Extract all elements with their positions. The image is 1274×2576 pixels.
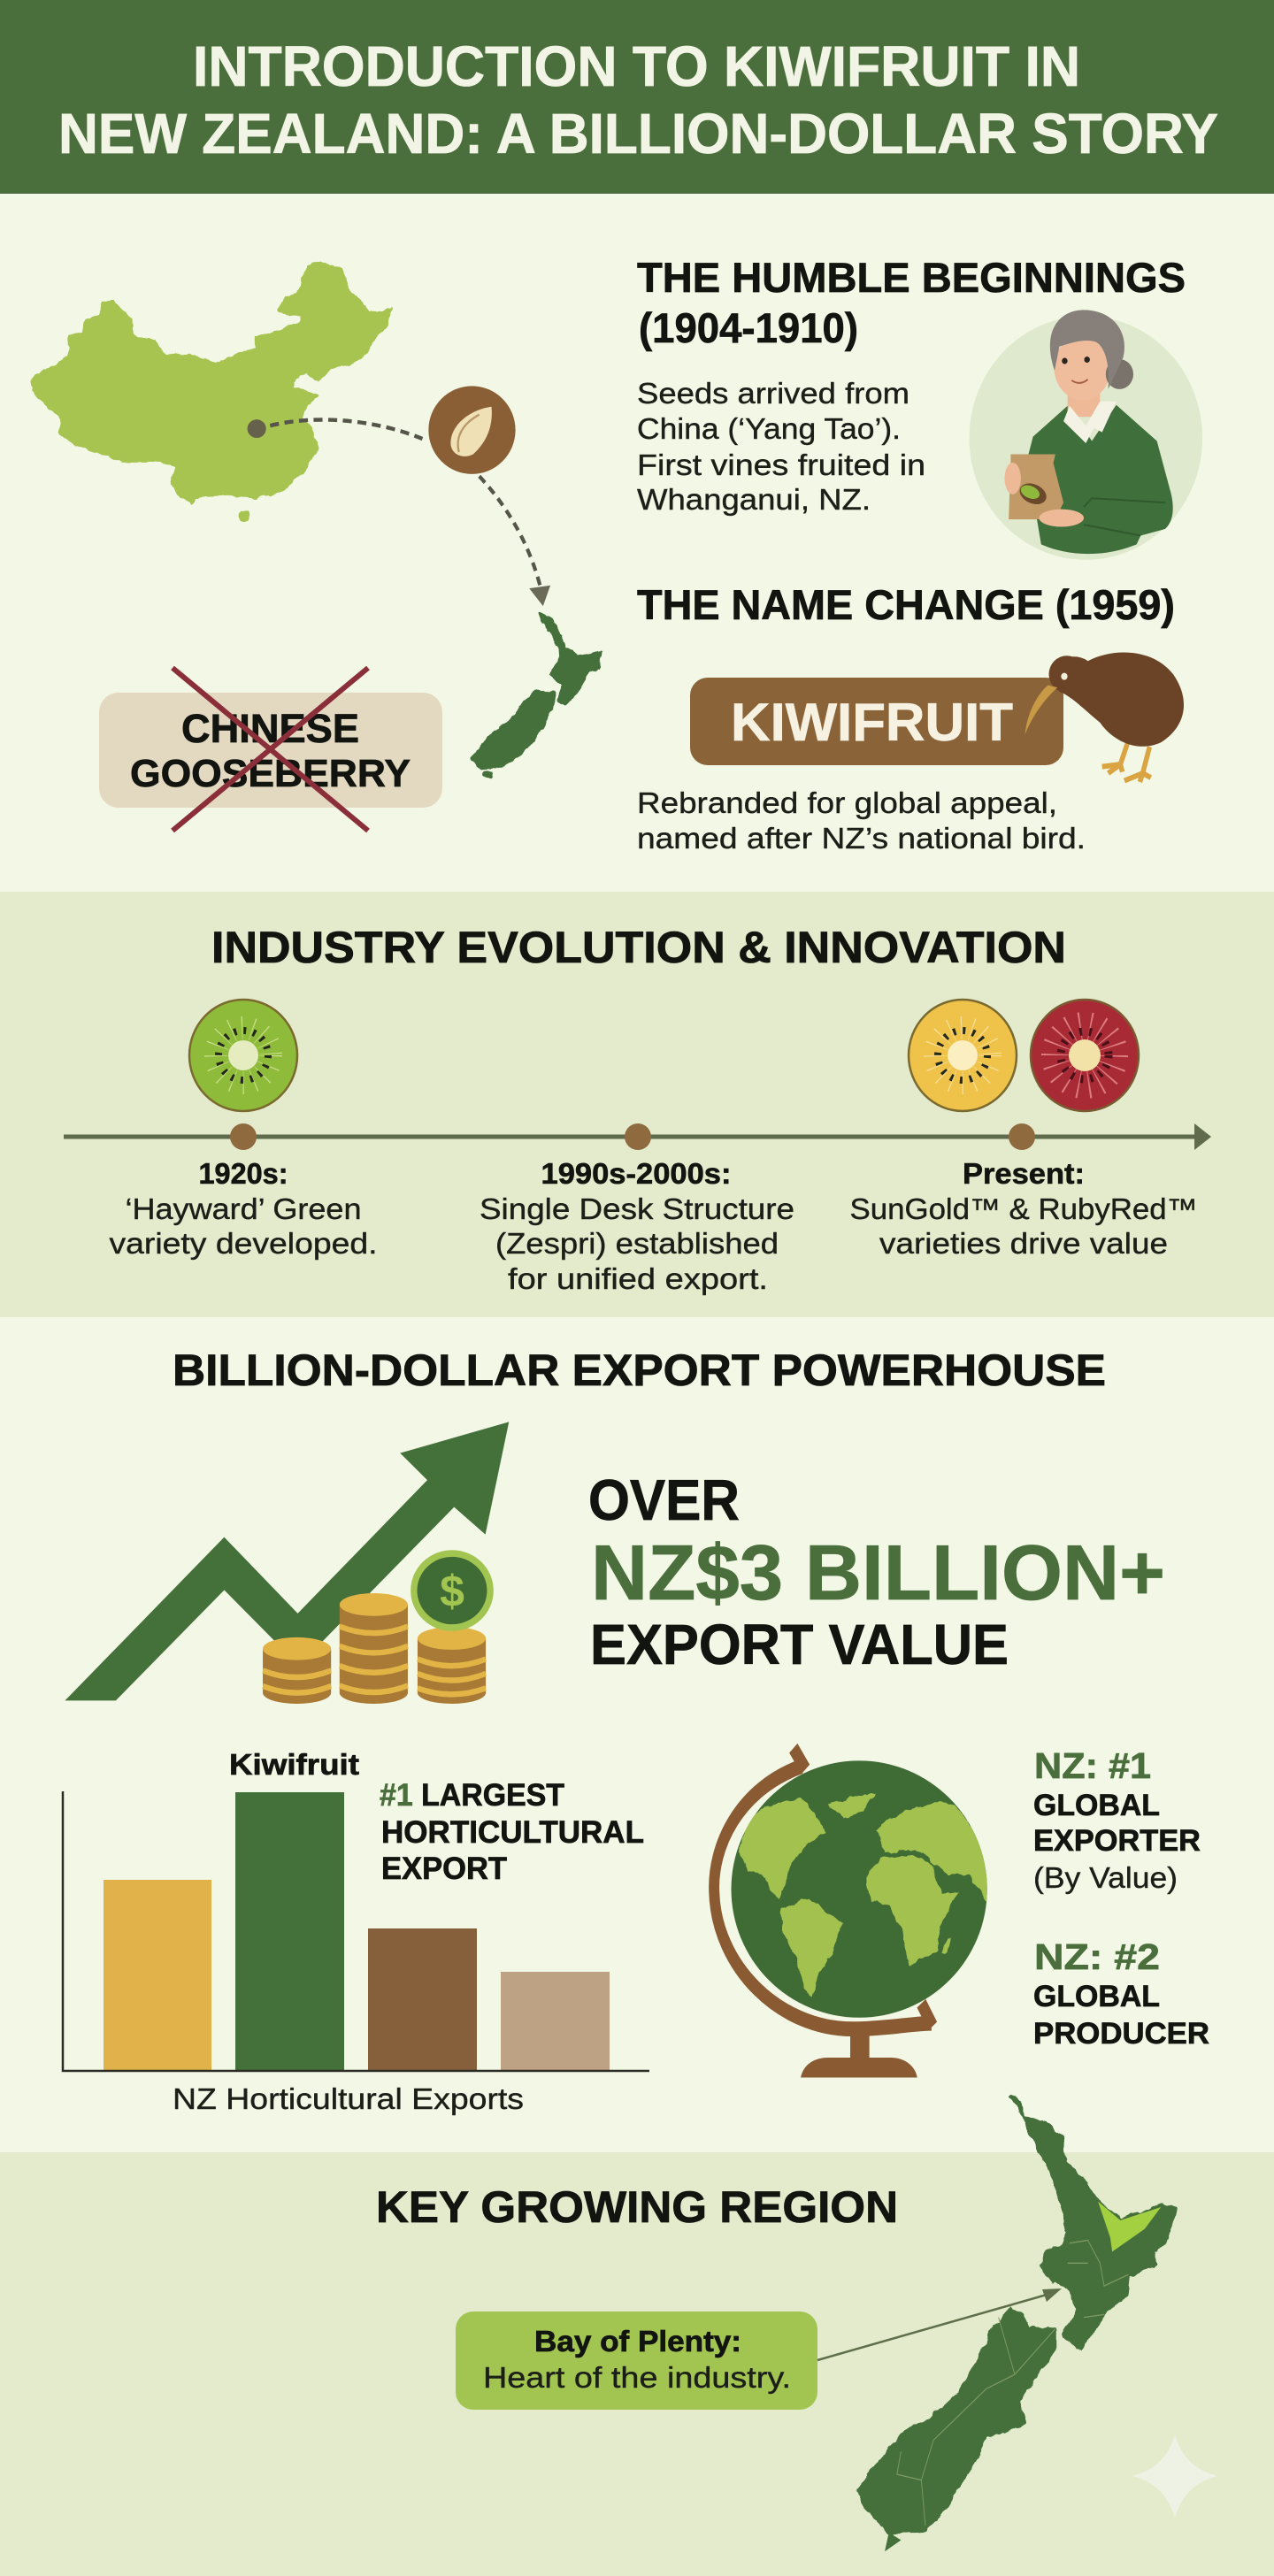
timeline text: 1920s: ‘Hayward’ Green xyxy=(126,1192,361,1225)
callout: Bay of Plenty xyxy=(456,2312,817,2410)
stat: global exporter: NZ: #1 xyxy=(1034,1745,1151,1786)
timeline text: 1990s-2000s: 1990s-2000s: xyxy=(541,1157,731,1190)
timeline arrow xyxy=(64,1123,1211,1150)
growth arrow xyxy=(65,1422,509,1700)
South Island xyxy=(858,2309,1055,2532)
icon: kiwi bird xyxy=(1025,652,1184,782)
heading: industry evolution: INDUSTRY EVOLUTION & INNOVATION xyxy=(211,923,1066,972)
text: rebranded: named after NZ’s national bird. xyxy=(637,822,1086,855)
callout: Bay of Plenty: Heart of the industry. xyxy=(483,2361,791,2394)
crossed out label: Chinese Gooseberry: CHINESE xyxy=(181,706,359,751)
chart arrow with coins xyxy=(65,1422,509,1704)
dollar badge circle xyxy=(411,1550,494,1631)
callout: largest horticultural export xyxy=(380,1778,644,1886)
title xyxy=(58,34,1218,165)
text: rebranded: Rebranded for global appeal, xyxy=(637,786,1057,819)
timeline text: 1920s: variety developed. xyxy=(110,1227,377,1260)
chart label: Kiwifruit: Kiwifruit xyxy=(229,1748,359,1781)
route start marker xyxy=(248,419,266,438)
stat: over NZ$3 billion: OVER xyxy=(588,1468,740,1532)
icon: globe xyxy=(714,1748,990,2078)
panel: title banner xyxy=(0,0,1274,194)
illustration: woman holding seed bag xyxy=(970,310,1202,560)
map: China xyxy=(30,262,392,521)
heading: key growing region: KEY GROWING REGION xyxy=(376,2182,898,2232)
label: Kiwifruit xyxy=(690,678,1063,765)
text: rebranded xyxy=(637,786,1086,855)
stat: global exporter: GLOBAL xyxy=(1033,1789,1160,1822)
timeline text: 1920s: 1920s: xyxy=(198,1157,288,1190)
timeline text: present xyxy=(849,1157,1198,1260)
stat: over NZ$3 billion: EXPORT VALUE xyxy=(590,1613,1009,1676)
stat: global exporter: (By Value) xyxy=(1033,1861,1178,1894)
callout: largest horticultural export: EXPORT xyxy=(381,1852,507,1886)
timeline text: 1990s-2000s: for unified export. xyxy=(508,1262,768,1295)
callout: largest horticultural export: HORTICULTURAL xyxy=(381,1815,644,1850)
icon: sparkle xyxy=(1132,2434,1217,2518)
arrow: callout to map xyxy=(817,2288,1062,2360)
heading: humble beginnings: (1904-1910) xyxy=(639,304,858,351)
stat: global producer xyxy=(1033,1936,1209,2051)
map: China to New Zealand seed route xyxy=(30,262,601,778)
crossed out label: Chinese Gooseberry xyxy=(99,668,442,831)
heading: export powerhouse: BILLION-DOLLAR EXPORT POWERHOUSE xyxy=(173,1346,1106,1395)
heading: humble beginnings: THE HUMBLE BEGINNINGS xyxy=(637,254,1186,301)
stat: global producer: GLOBAL xyxy=(1033,1980,1160,2013)
panel: origins xyxy=(0,194,1274,892)
Stewart Island xyxy=(885,2533,901,2551)
title: INTRODUCTION TO KIWIFRUIT IN xyxy=(193,34,1080,98)
panel: industry evolution xyxy=(0,892,1274,1317)
callout: largest horticultural export: #1 LARGEST xyxy=(380,1778,564,1813)
text: seeds arrived: Whanganui, NZ. xyxy=(637,483,871,516)
stat: over NZ$3 billion: NZ$3 BILLION+ xyxy=(591,1529,1165,1616)
icon: red kiwifruit slice xyxy=(1031,1000,1139,1111)
icon: green kiwifruit slice xyxy=(189,1000,297,1111)
timeline text: present: Present: xyxy=(963,1157,1085,1190)
stat: global producer: NZ: #2 xyxy=(1034,1936,1160,1977)
title: NEW ZEALAND: A BILLION-DOLLAR STORY xyxy=(58,102,1218,165)
timeline text: 1990s-2000s: (Zespri) established xyxy=(495,1227,779,1260)
icon: seed xyxy=(428,386,516,474)
timeline text: 1990s-2000s: Single Desk Structure xyxy=(480,1192,794,1225)
timeline text: 1920s xyxy=(110,1157,377,1260)
text: seeds arrived: Seeds arrived from xyxy=(637,377,909,410)
map: New Zealand with Bay of Plenty xyxy=(858,2097,1175,2551)
chart caption: NZ Horticultural Exports xyxy=(173,2082,524,2115)
text: seeds arrived: China (‘Yang Tao’). xyxy=(637,412,901,445)
dashed arrow to New Zealand xyxy=(480,476,550,606)
Bay of Plenty region xyxy=(1098,2202,1161,2251)
heading: name change: THE NAME CHANGE (1959) xyxy=(637,581,1175,628)
panel: key growing region xyxy=(0,2097,1274,2576)
icon: dollar sign: $ xyxy=(440,1567,464,1616)
stat: over NZ$3 billion xyxy=(588,1468,1165,1676)
dashed route to seed xyxy=(270,419,422,439)
icon: gold kiwifruit slice xyxy=(909,1000,1017,1111)
timeline text: present: varieties drive value xyxy=(879,1227,1168,1260)
panel: export powerhouse xyxy=(62,1353,1209,2116)
heading: humble beginnings xyxy=(637,254,1186,351)
timeline text: present: SunGold™ & RubyRed™ xyxy=(849,1192,1198,1225)
North Island xyxy=(1009,2097,1175,2349)
stat: global exporter: EXPORTER xyxy=(1033,1824,1201,1858)
bar chart: NZ horticultural exports xyxy=(63,1748,649,2115)
callout: Bay of Plenty: Bay of Plenty: xyxy=(534,2325,741,2358)
text: seeds arrived xyxy=(637,377,925,516)
stat: global producer: PRODUCER xyxy=(1033,2017,1209,2051)
coin stacks xyxy=(263,1593,486,1704)
text: seeds arrived: First vines fruited in xyxy=(637,448,925,481)
timeline text: 1990s-2000s xyxy=(480,1157,794,1295)
label: Kiwifruit: KIWIFRUIT xyxy=(731,693,1013,752)
map: New Zealand small xyxy=(472,614,601,778)
crossed out label: Chinese Gooseberry: GOOSEBERRY xyxy=(130,752,411,795)
stat: global exporter xyxy=(1033,1745,1201,1894)
